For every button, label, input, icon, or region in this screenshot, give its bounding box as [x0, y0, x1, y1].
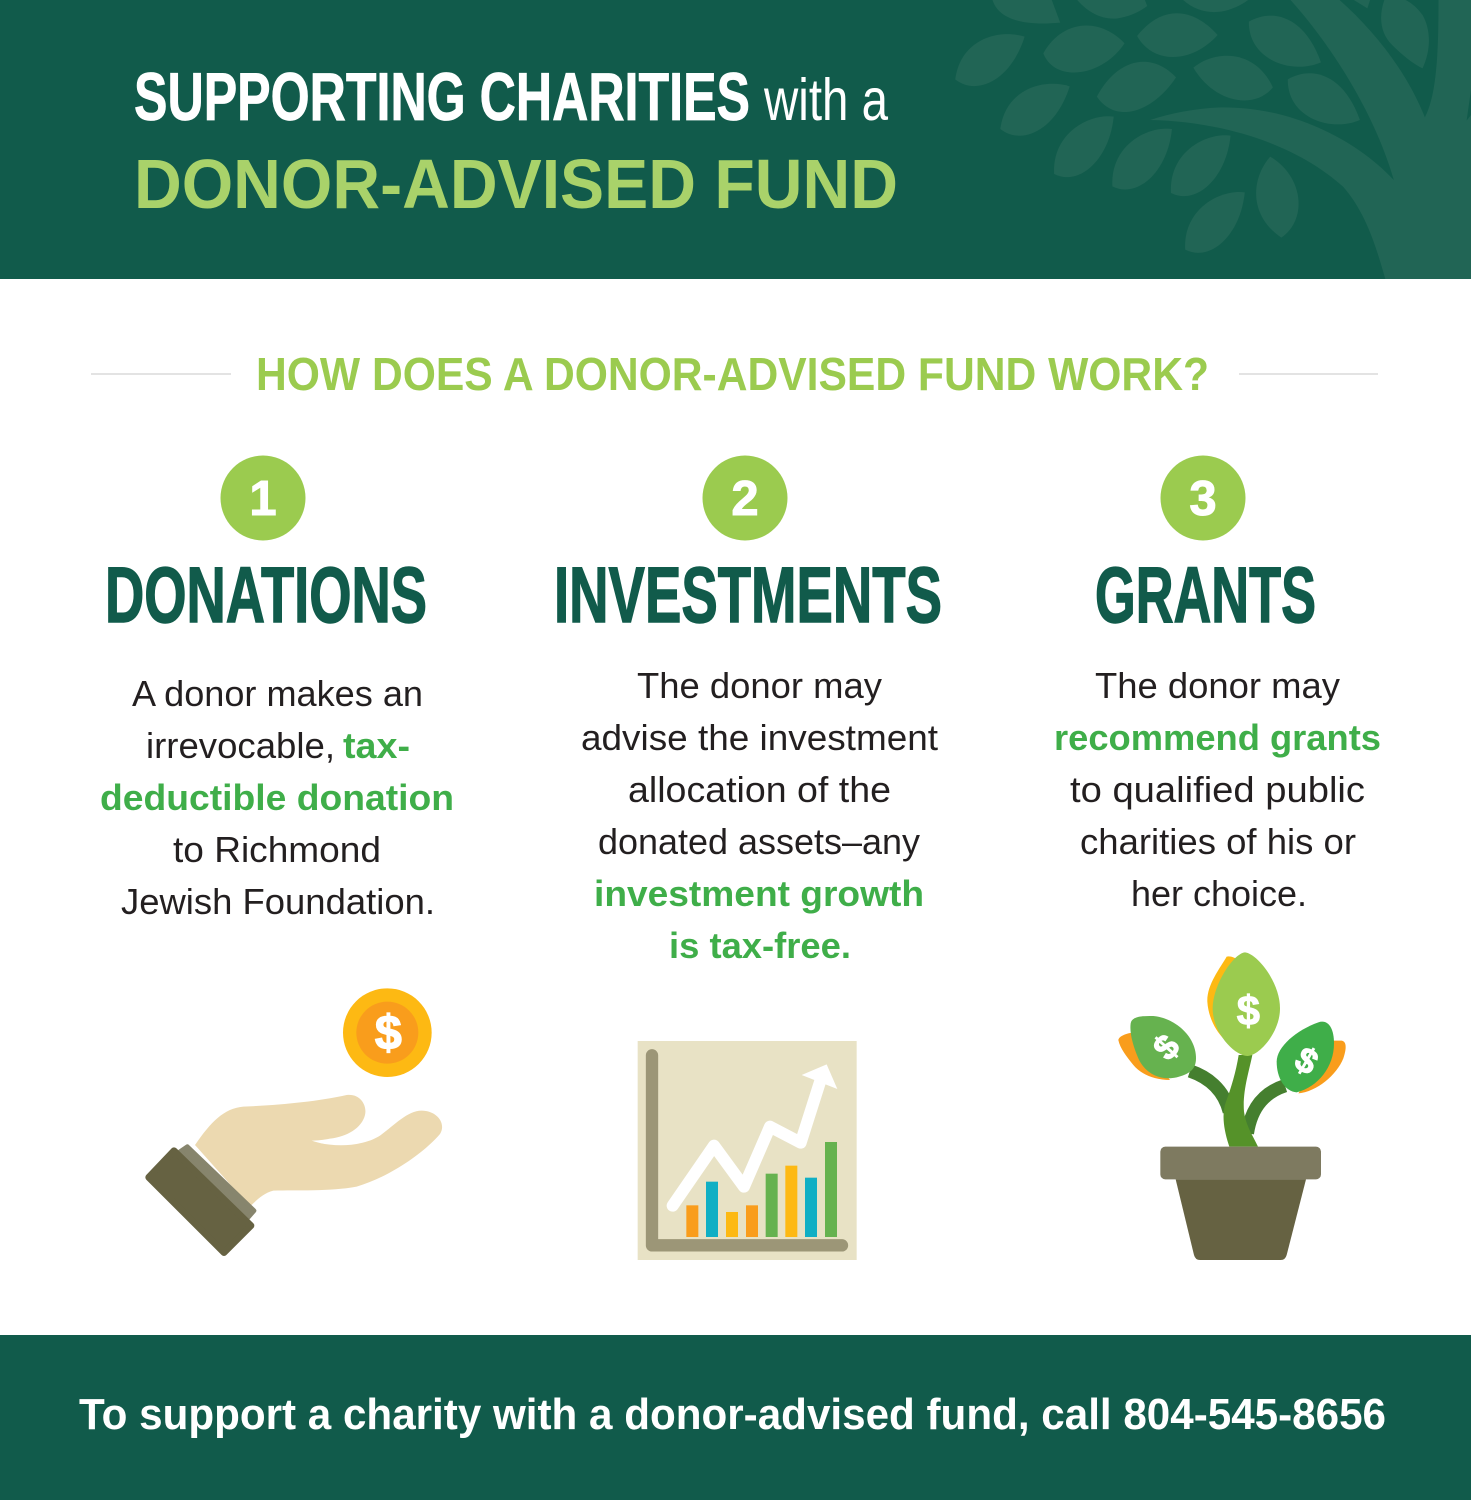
description: donations: Jewish Foundation. — [121, 881, 435, 922]
icon: hand receiving coin: $ — [375, 1006, 402, 1060]
panel: step 2 investments — [554, 456, 942, 1260]
panel: step 3 grants — [1054, 456, 1381, 1260]
icon: hand receiving coin — [149, 988, 442, 1253]
description: investments: The donor may — [637, 665, 882, 706]
description: donations: deductible donation — [100, 777, 454, 818]
title: DONOR-ADVISED FUND — [134, 145, 898, 223]
description: donations — [100, 673, 454, 922]
tree and leaves watermark — [955, 0, 1471, 279]
step number 3 — [1160, 456, 1246, 540]
section heading: HOW DOES A DONOR-ADVISED FUND WORK? — [256, 348, 1209, 400]
description: grants: her choice. — [1131, 873, 1307, 914]
step number 2: 2 — [731, 472, 759, 526]
description: grants: to qualified public — [1070, 769, 1365, 810]
heading: donations: DONATIONS — [105, 550, 427, 639]
description: donations: to Richmond — [173, 829, 381, 870]
call to action: To support a charity with a donor-advised fund, call 804-545-8656 — [79, 1390, 1386, 1439]
footer banner — [0, 1335, 1471, 1500]
icon: growth chart — [638, 1041, 857, 1260]
description: investments: advise the investment — [581, 717, 938, 758]
step number 1 — [220, 456, 306, 540]
icon: money plant: $ — [1146, 1027, 1188, 1068]
header banner — [0, 0, 1471, 279]
title: with a — [763, 67, 888, 133]
description: donations: irrevocable, — [146, 725, 335, 766]
description: investments — [581, 665, 938, 966]
heading: investments: INVESTMENTS — [554, 550, 942, 639]
description: grants — [1054, 665, 1381, 914]
description: donations: tax- — [343, 725, 410, 766]
description: grants: charities of his or — [1080, 821, 1356, 862]
description: investments: donated assets–any — [598, 821, 920, 862]
description: investments: investment growth — [594, 873, 924, 914]
description: investments: is tax-free. — [669, 925, 851, 966]
step number 3: 3 — [1189, 472, 1217, 526]
panel: step 1 donations — [100, 456, 454, 1253]
description: investments: allocation of the — [628, 769, 891, 810]
description: grants: recommend grants — [1054, 717, 1381, 758]
icon: money plant — [1118, 952, 1346, 1260]
title — [134, 59, 898, 223]
description: donations: A donor makes an — [132, 673, 423, 714]
icon: money plant: $ — [1288, 1039, 1325, 1083]
heading: grants: GRANTS — [1095, 550, 1316, 639]
icon: money plant: $ — [1237, 987, 1260, 1034]
title: SUPPORTING CHARITIES — [134, 59, 750, 135]
description: grants: The donor may — [1095, 665, 1340, 706]
step number 2 — [702, 456, 788, 540]
step number 1: 1 — [249, 472, 277, 526]
